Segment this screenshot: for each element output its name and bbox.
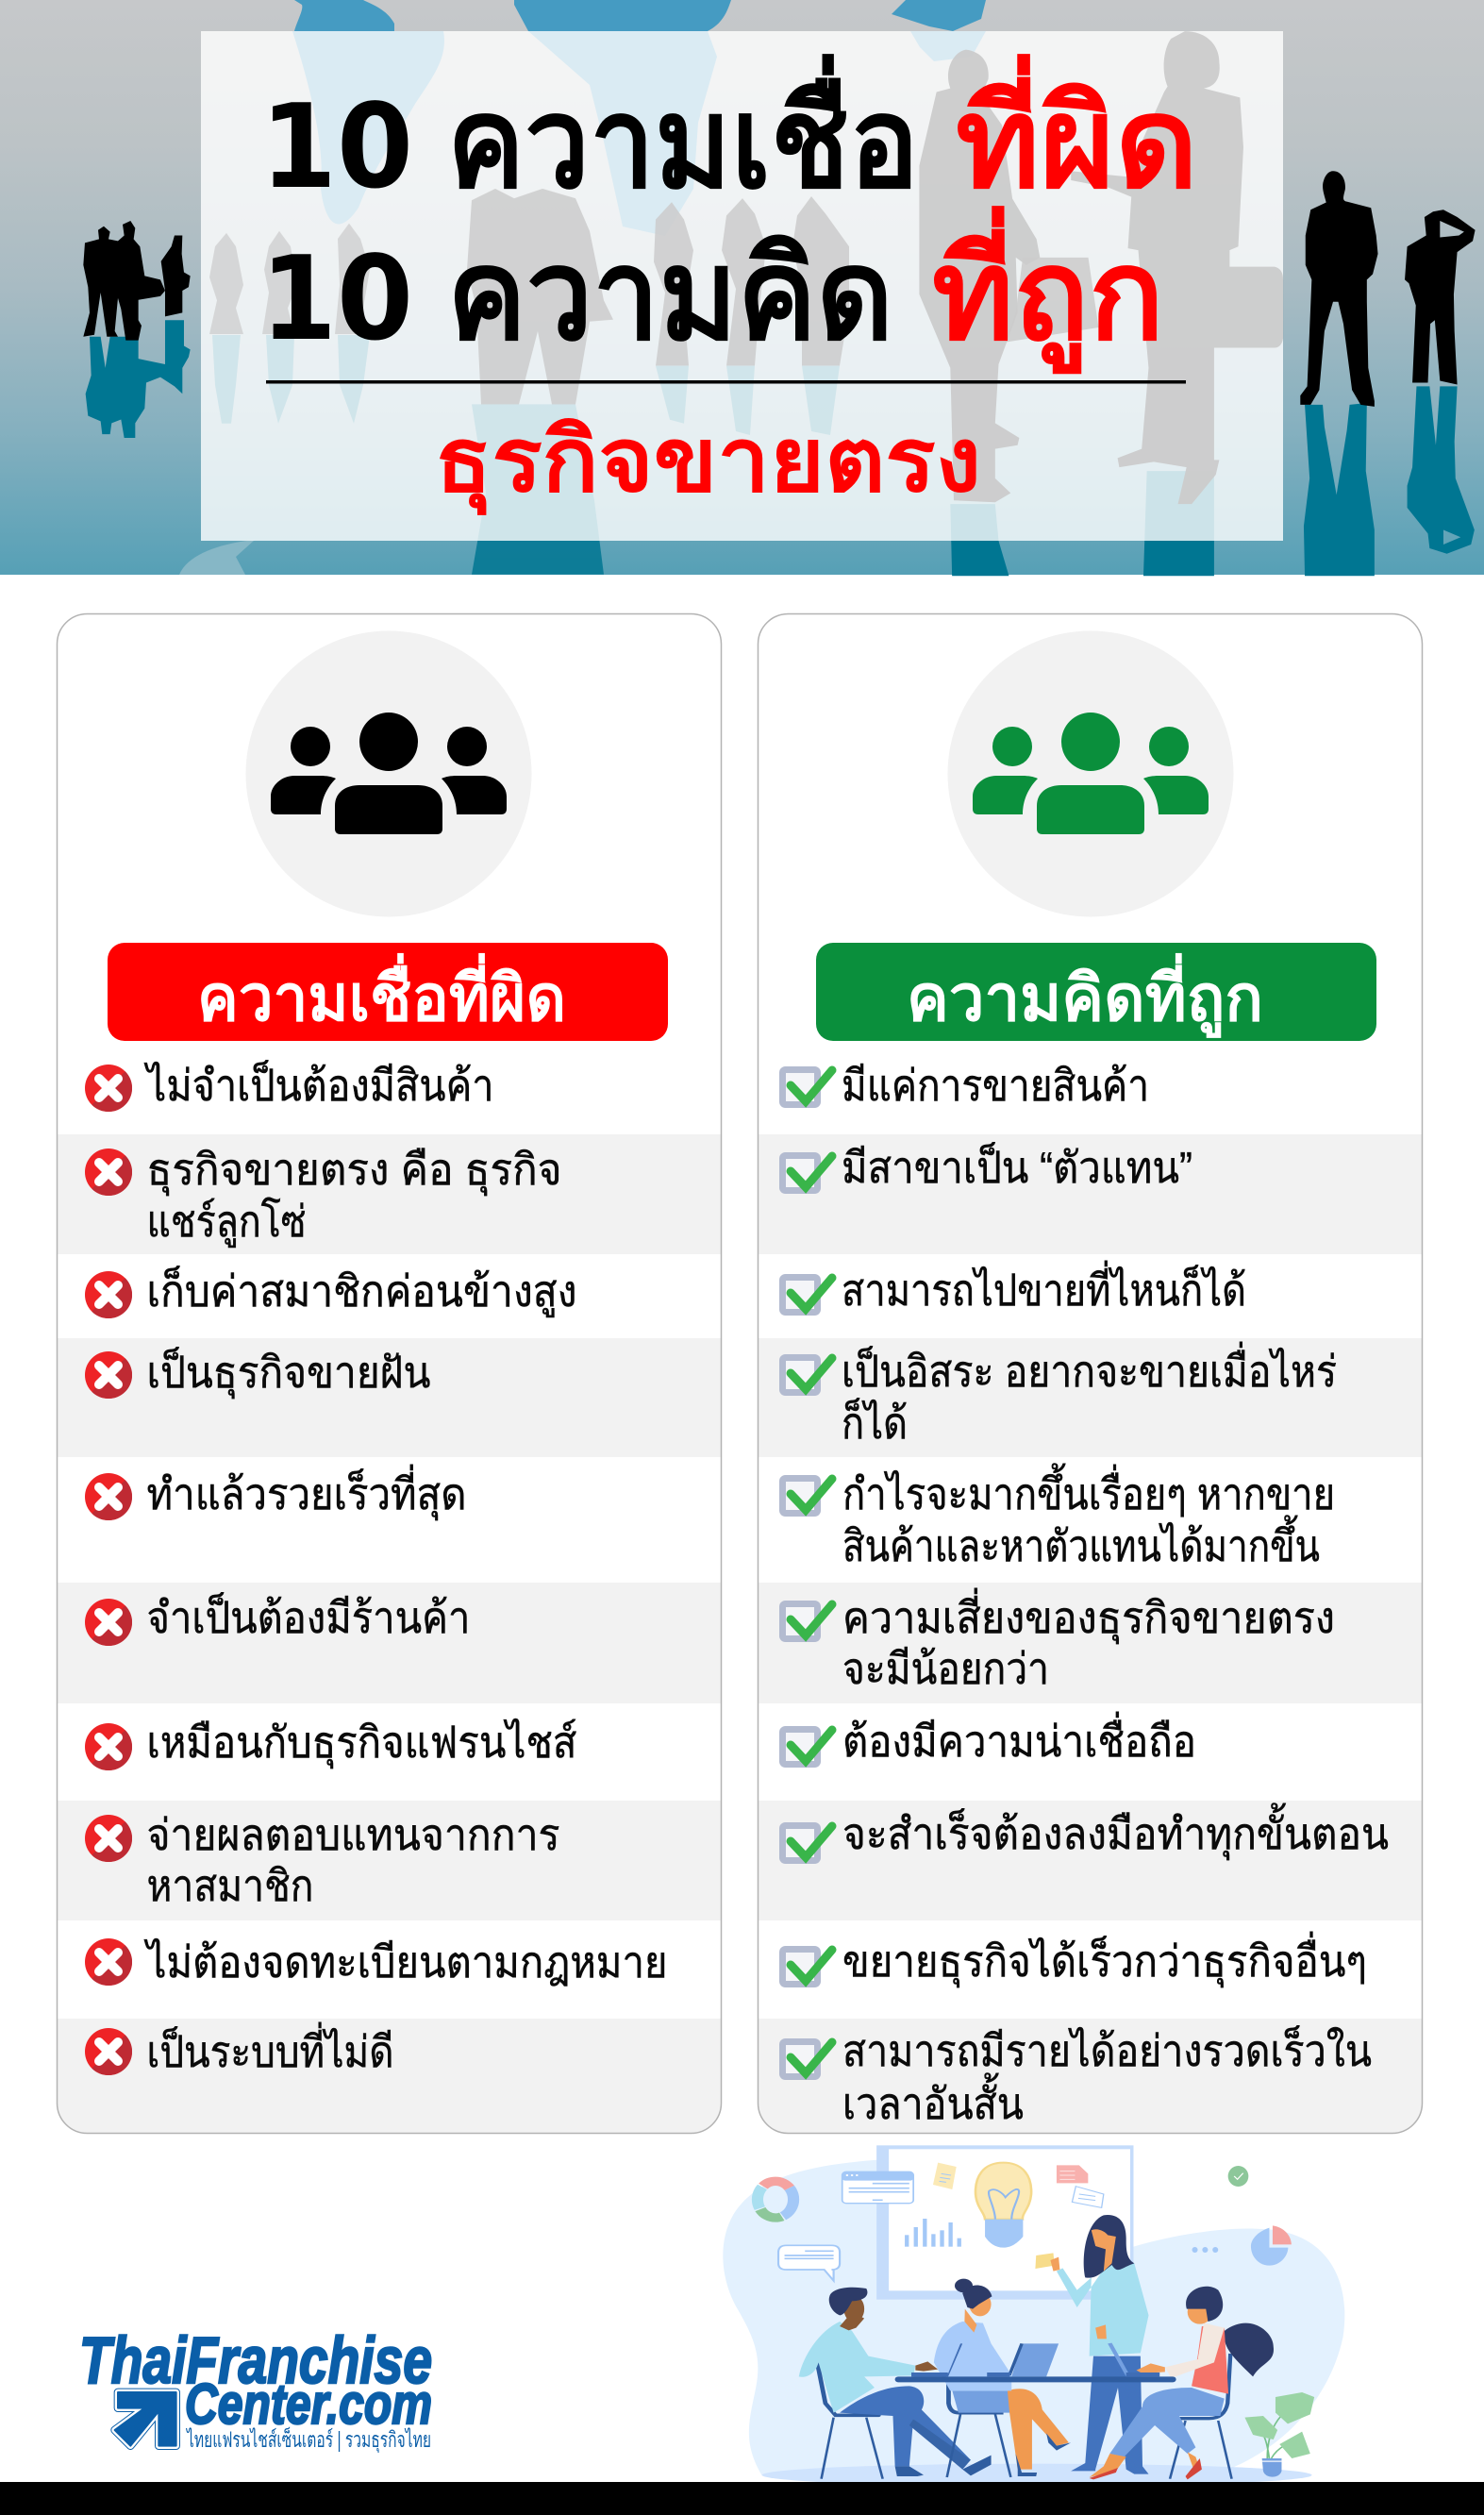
icon: arrow xyxy=(115,2392,176,2446)
background grey figures group xyxy=(209,189,849,575)
item 4: เป็นอิสระ อยากจะขายเมื่อไหร่ xyxy=(842,1341,1337,1396)
person: standing woman xyxy=(1035,2215,1149,2474)
heading: right thinking xyxy=(816,943,1376,1041)
item 2 xyxy=(85,1145,562,1248)
plant xyxy=(1244,2392,1314,2477)
notes xyxy=(933,2163,1104,2207)
item 5 xyxy=(783,1463,1335,1570)
logo: ThaiFranchise Center.com: ThaiFranchise xyxy=(79,2323,432,2397)
item 7: เหมือนกับธุรกิจแฟรนไชส์ xyxy=(147,1718,577,1769)
left group silhouette xyxy=(83,221,191,438)
item 6: จำเป็นต้องมีร้านค้า xyxy=(147,1592,470,1642)
title line 1 black: 10 xyxy=(260,80,413,215)
light bulb xyxy=(975,2163,1031,2248)
world map shapes xyxy=(292,0,986,236)
item 4: ก็ได้ xyxy=(842,1398,908,1448)
item 4: เป็นธุรกิจขายฝัน xyxy=(147,1347,430,1400)
title line 2 black xyxy=(260,221,893,369)
title line 2 black: 10 xyxy=(260,232,413,367)
bottom black band xyxy=(0,2482,1484,2515)
subtitle: ธุรกิจขายตรง xyxy=(435,410,981,515)
whiteboard xyxy=(876,2145,1133,2300)
heading: right thinking: ความคิดที่ถูก xyxy=(907,952,1263,1039)
bar chart xyxy=(905,2219,961,2247)
item 10: สามารถมีรายได้อย่างรวดเร็วใน xyxy=(842,2025,1372,2075)
item 5: สินค้าและหาตัวแทนได้มากขึ้น xyxy=(842,1515,1320,1570)
title line 1 red: ที่ผิด xyxy=(956,53,1198,217)
item 10: เวลาอันสั้น xyxy=(842,2072,1024,2128)
item 8: หาสมาชิก xyxy=(147,1861,313,1910)
item 5 xyxy=(85,1464,466,1521)
illustration: team meeting xyxy=(723,2145,1344,2487)
background blob xyxy=(723,2159,1344,2475)
logo: ThaiFranchise Center.com: Center.com xyxy=(185,2372,432,2436)
title line 2 red: ที่ถูก xyxy=(932,205,1164,375)
item 8: จ่ายผลตอบแทนจากการ xyxy=(147,1810,560,1859)
icon: people black xyxy=(245,630,532,917)
item 8: จะสำเร็จต้องลงมือทำทุกขั้นตอน xyxy=(842,1802,1389,1861)
item 3: สามารถไปขายที่ไหนก็ได้ xyxy=(842,1260,1246,1315)
item 2: แชร์ลูกโซ่ xyxy=(147,1197,306,1248)
item 2: ธุรกิจขายตรง คือ ธุรกิจ xyxy=(147,1145,562,1197)
person: seated woman xyxy=(911,2279,1071,2477)
header background with world map and silhouettes xyxy=(0,0,1484,576)
item 6: จะมีน้อยกว่า xyxy=(842,1644,1049,1693)
item 10 xyxy=(85,2021,394,2076)
table xyxy=(895,2376,1176,2382)
logo: ThaiFranchise Center.com: ไทยแฟรนไชส์เซ็นเตอร์ | รวมธุรกิจไทย xyxy=(186,2425,431,2453)
item 1: มีแค่การขายสินค้า xyxy=(842,1061,1149,1110)
check badge xyxy=(1228,2166,1248,2187)
browser window xyxy=(842,2171,913,2204)
large figures and right silhouettes xyxy=(919,31,1476,576)
item 8 xyxy=(85,1810,560,1910)
item 2: มีสาขาเป็น “ตัวแทน” xyxy=(842,1142,1192,1192)
item 6: ความเสี่ยงของธุรกิจขายตรง xyxy=(842,1587,1335,1645)
panel: right thinking xyxy=(758,613,1423,2134)
icon: people green xyxy=(947,630,1234,917)
item 4 xyxy=(783,1341,1337,1448)
speech bubble xyxy=(778,2245,840,2281)
item 3 xyxy=(783,1260,1246,1315)
heading: wrong beliefs xyxy=(108,943,668,1041)
item 5: กำไรจะมากขึ้นเรื่อยๆ หากขาย xyxy=(842,1463,1335,1518)
person: seated man xyxy=(799,2288,992,2479)
title line 1 black: ความเชื่อ xyxy=(447,53,919,217)
item 9: ไม่ต้องจดทะเบียนตามกฎหมาย xyxy=(143,1937,668,1987)
title line 1 black xyxy=(260,53,919,217)
item 3: เก็บค่าสมาชิกค่อนข้างสูง xyxy=(147,1266,577,1317)
title line 2 black: ความคิด xyxy=(447,221,893,369)
item 10 xyxy=(783,2025,1372,2128)
person: seated woman right xyxy=(1090,2287,1274,2479)
donut chart xyxy=(758,2181,793,2218)
heading: wrong beliefs: ความเชื่อที่ผิด xyxy=(197,952,566,1036)
item 5: ทำแล้วรวยเร็วที่สุด xyxy=(147,1464,466,1521)
item 6 xyxy=(783,1587,1335,1693)
item 1: ไม่จำเป็นต้องมีสินค้า xyxy=(143,1060,494,1110)
title panel xyxy=(201,31,1283,541)
item 9: ขยายธุรกิจได้เร็วกว่าธุรกิจอื่นๆ xyxy=(842,1931,1367,1988)
logo: ThaiFranchise Center.com xyxy=(79,2323,432,2453)
panel: wrong beliefs xyxy=(57,613,722,2134)
pie chart xyxy=(1192,2225,1292,2266)
item 7: ต้องมีความน่าเชื่อถือ xyxy=(842,1711,1196,1766)
item 10: เป็นระบบที่ไม่ดี xyxy=(147,2021,394,2076)
